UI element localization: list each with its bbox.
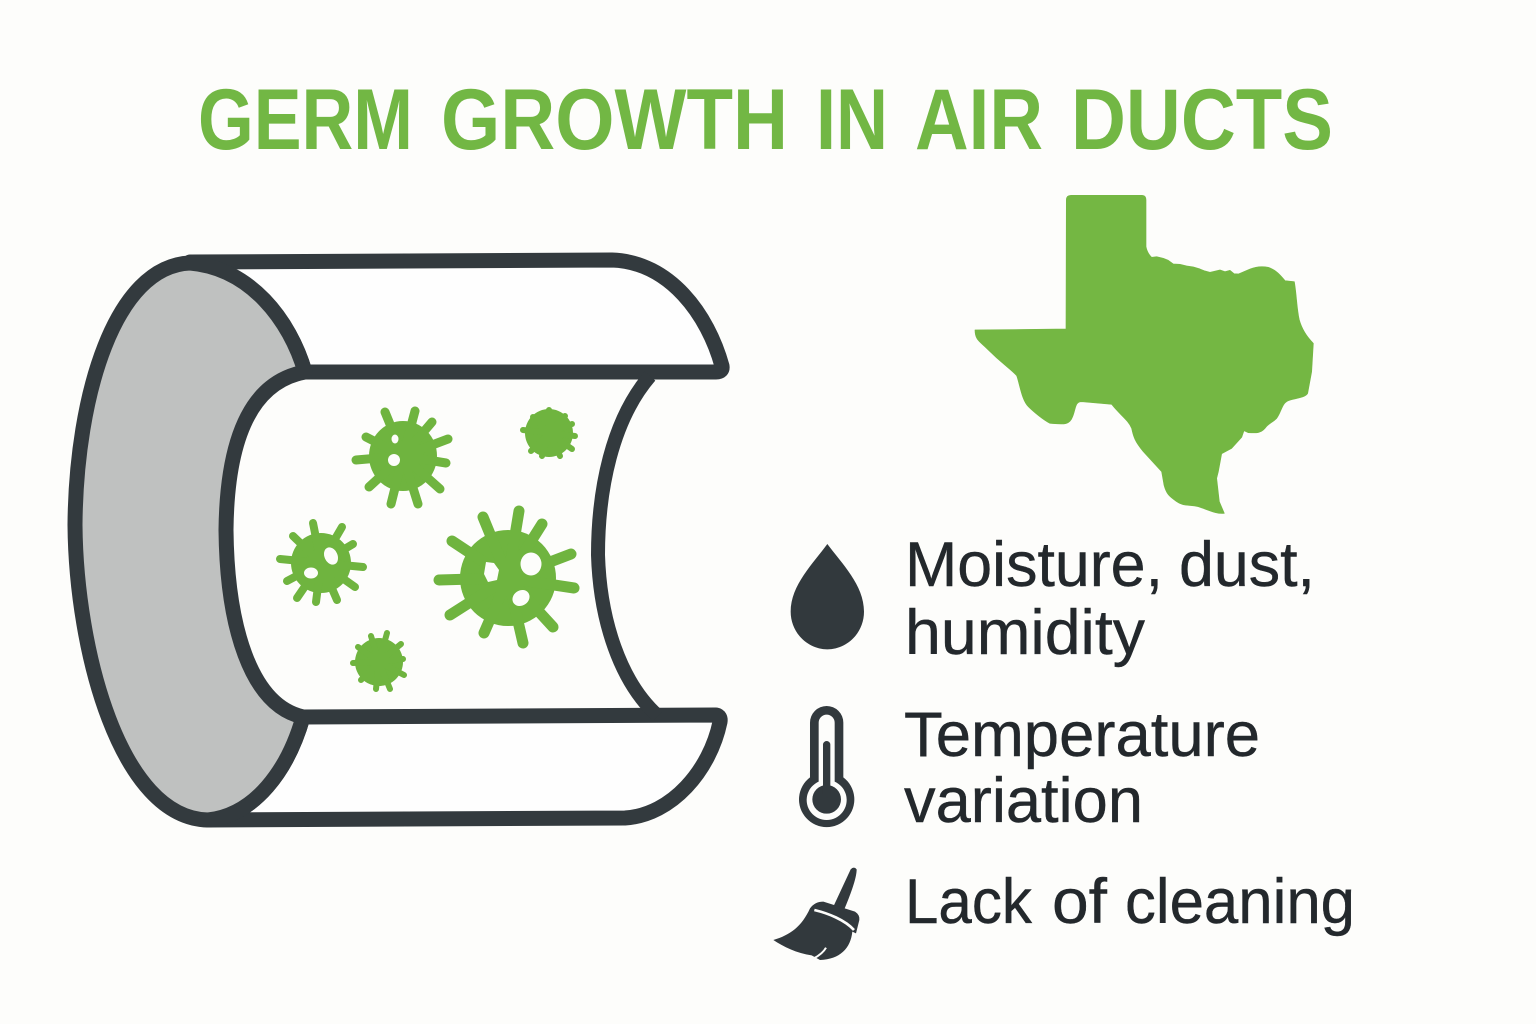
text: temperature variation: variation	[904, 766, 1143, 836]
germ 1	[356, 411, 448, 504]
text: lack of cleaning: of	[1052, 867, 1108, 937]
title: AIR	[915, 72, 1043, 168]
duct top band	[190, 260, 722, 372]
duct far-end arc	[598, 376, 658, 716]
title: GERM	[198, 72, 413, 168]
germ 5	[353, 633, 404, 689]
icon: water drop	[791, 544, 864, 649]
text: temperature variation: Temperature	[904, 700, 1260, 770]
title: DUCTS	[1071, 72, 1333, 168]
duct bottom band	[208, 715, 720, 820]
germ 3	[280, 523, 363, 602]
text: lack of cleaning: cleaning	[1125, 867, 1355, 937]
list item: temperature	[799, 700, 1260, 836]
title: IN	[816, 72, 888, 168]
icon: thermometer	[799, 706, 854, 827]
list item: moisture	[791, 530, 1315, 668]
map: Texas silhouette	[975, 195, 1313, 513]
text: moisture, dust, humidity: Moisture,	[905, 530, 1163, 600]
germ 4 large	[439, 511, 574, 643]
illustration: air duct with germs	[75, 260, 722, 820]
icon: broom	[773, 868, 859, 960]
text: lack of cleaning: Lack	[905, 867, 1032, 937]
list item: cleaning	[773, 867, 1355, 960]
title: GROWTH	[441, 72, 788, 168]
duct opening grey crescent	[75, 263, 305, 820]
text: moisture, dust, humidity: humidity	[905, 598, 1146, 668]
text: moisture, dust, humidity: dust,	[1179, 530, 1315, 600]
germ 2	[523, 409, 575, 457]
